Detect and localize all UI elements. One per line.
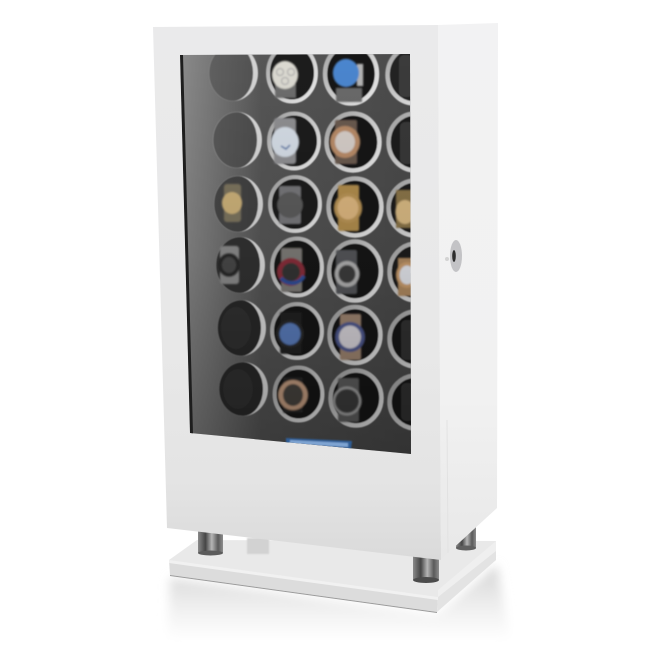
- slot row 6 column 2 with rose gold watch: [274, 368, 322, 420]
- slot row 3 column 3 with gold watch: [328, 178, 382, 236]
- slot row 5 column 1 (empty): [218, 300, 266, 356]
- slot row 1 column 1 (empty): [210, 54, 259, 102]
- slot row 4 column 4 with white and rose watch: [386, 242, 411, 303]
- lock: [445, 240, 462, 272]
- cabinet front frame: [153, 25, 441, 560]
- slot row 6 column 4 (empty): [386, 373, 411, 431]
- slot row 5 column 3 with white and rose watch: [330, 307, 380, 363]
- slot row 4 column 1 (watch): [216, 237, 265, 293]
- slot row 3 column 1 (watch): [214, 176, 263, 232]
- slot row 1 column 3 with blue dial watch: [325, 44, 377, 104]
- floor shadow: [168, 565, 510, 640]
- cabinet side panel: [438, 23, 498, 560]
- slot row 4 column 3 with steel watch: [329, 242, 381, 300]
- slot row 4 column 2 with GMT watch: [272, 238, 322, 296]
- slot row 6 column 1 (empty): [219, 362, 268, 416]
- leg: front left: [198, 530, 223, 556]
- product photo: watch winder cabinet: [153, 23, 504, 622]
- glass shading: [186, 124, 411, 454]
- blue illuminated display: [286, 438, 352, 449]
- glass window: [180, 54, 411, 454]
- rear leg reflection: [247, 538, 269, 554]
- slot row 1 column 4 (empty): [384, 54, 410, 106]
- slot row 3 column 2 with grey steel watch: [270, 177, 320, 231]
- slot row 6 column 3 with dark chronograph: [330, 370, 382, 426]
- slot row 5 column 4 (empty): [386, 309, 411, 369]
- glass left inner edge: [180, 55, 193, 434]
- slot row 3 column 4 with gold watch: [386, 178, 410, 238]
- slot row 1 column 2 with white chronograph: [268, 44, 316, 102]
- leg: front right: [413, 556, 439, 583]
- slot row 2 column 2 with white and blue watch: [269, 114, 319, 168]
- slot row 2 column 4 (empty): [386, 111, 410, 173]
- leg: rear right: [456, 525, 476, 550]
- slot row 2 column 1 (empty): [213, 112, 262, 168]
- slot row 2 column 3 with rose gold chronograph: [326, 114, 380, 170]
- base plate: [169, 540, 496, 613]
- slot row 5 column 2 with blue dial watch: [272, 304, 322, 358]
